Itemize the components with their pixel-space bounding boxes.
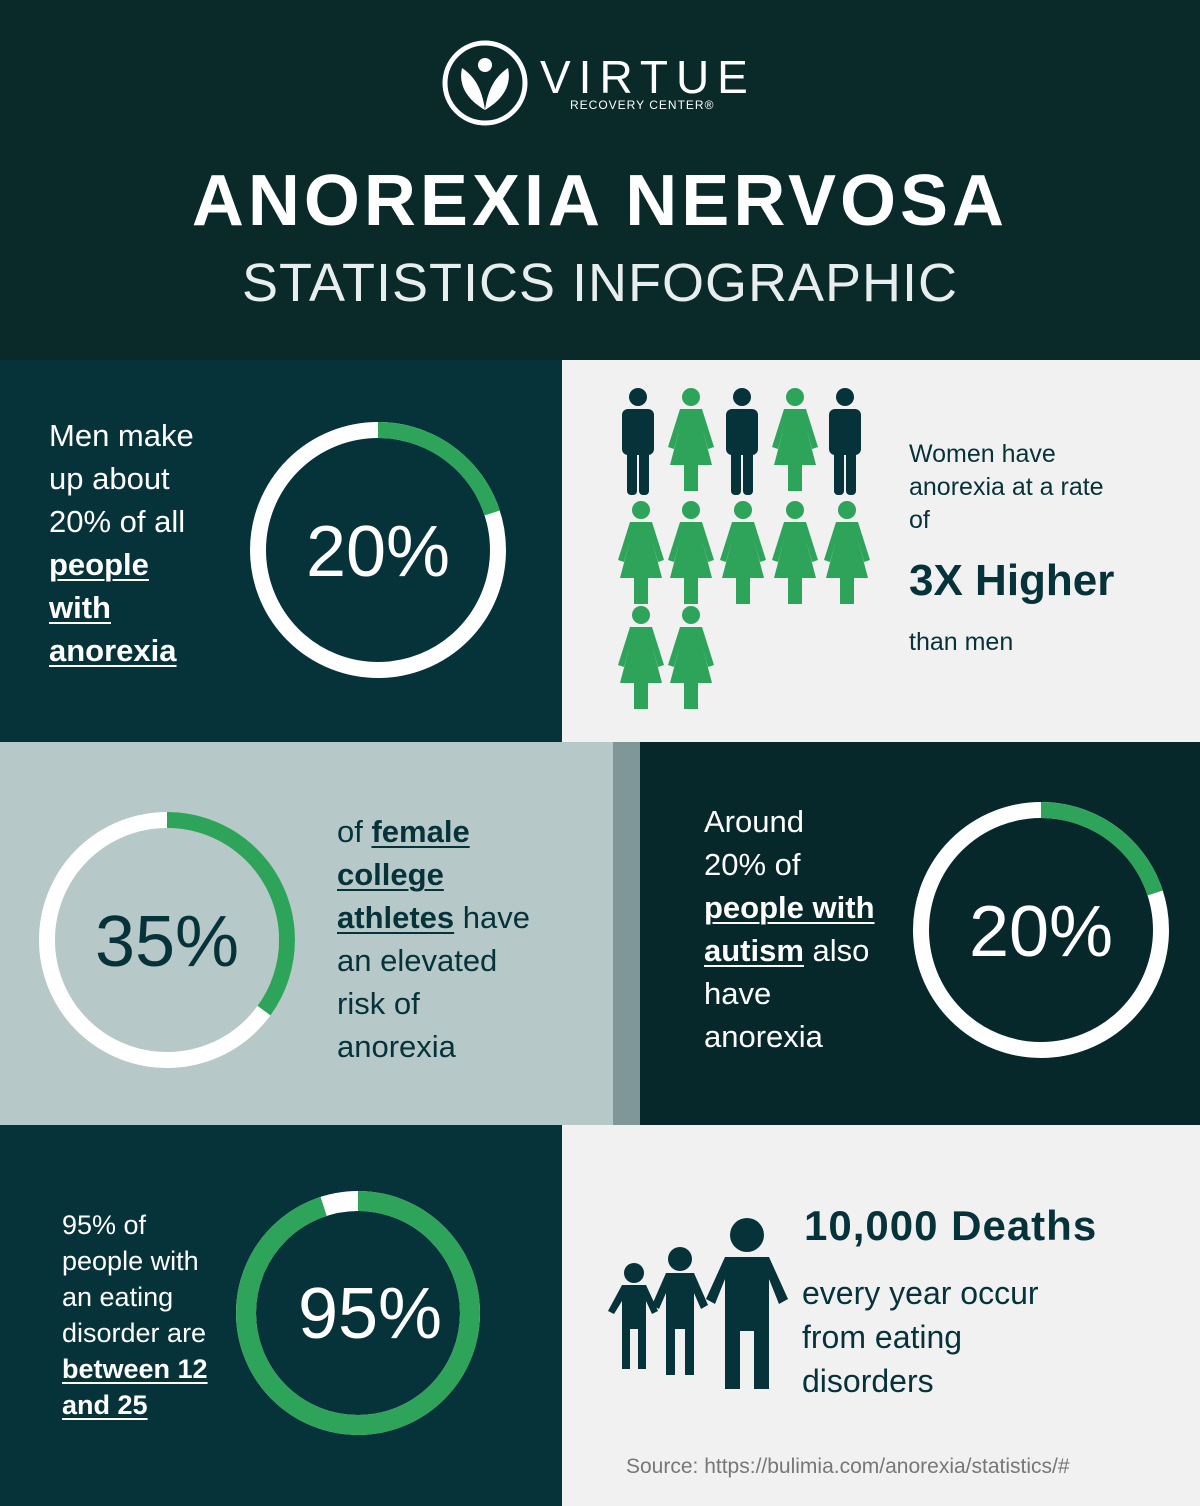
text: men make up: Men make <box>49 418 194 453</box>
icon: people grid <box>618 388 870 709</box>
text: autism: autism also <box>704 933 869 968</box>
panel: women 3x <box>562 360 1200 742</box>
text: athletes: an elevated <box>337 943 497 978</box>
text: deaths: from eating <box>802 1319 962 1355</box>
text: age <box>62 1210 208 1420</box>
panel: athletes 35% <box>0 742 613 1125</box>
text: age: and 25 <box>62 1390 148 1420</box>
text: athletes: athletes have <box>337 900 530 935</box>
text: age: 95% of <box>62 1210 146 1240</box>
text: age: an eating <box>62 1282 173 1312</box>
text: autism: people with <box>704 890 874 925</box>
text: deaths <box>802 1275 1039 1399</box>
donut: 20%: 20% <box>306 512 450 592</box>
icon: family <box>608 1218 788 1389</box>
panel: women 3x: than men <box>909 628 1013 656</box>
logo <box>442 40 756 126</box>
donut: 35% <box>39 812 295 1068</box>
text: athletes: risk of <box>337 986 420 1021</box>
text: women rate: anorexia at a rate <box>909 473 1104 501</box>
panel: age 95% <box>0 1125 562 1506</box>
text: autism: have <box>704 976 771 1011</box>
text: women rate <box>909 440 1104 534</box>
donut: 20% <box>250 422 506 678</box>
text: autism: Around <box>704 804 804 839</box>
stat: 10,000 Deaths: 10,000 Deaths <box>804 1202 1097 1249</box>
text: men make up: 20% of all <box>49 504 185 539</box>
source: Source: https://bulimia.com/anorexia/statistics/# <box>626 1455 1070 1478</box>
logo: RECOVERY CENTER® <box>570 98 714 112</box>
text: men make up: up about <box>49 461 170 496</box>
text: athletes: anorexia <box>337 1029 456 1064</box>
icon: logo emblem <box>442 40 528 126</box>
text: men make up: anorexia <box>49 633 177 668</box>
donut: 20% autism: 20% <box>969 892 1113 972</box>
text: autism: 20% of <box>704 847 801 882</box>
text: deaths: every year occur <box>802 1275 1039 1311</box>
panel: men 20% <box>0 360 562 742</box>
logo: VIRTUE <box>540 51 756 103</box>
text: autism: anorexia <box>704 1019 823 1054</box>
donut: 95% <box>236 1191 480 1435</box>
header <box>0 0 1200 360</box>
text: athletes: college <box>337 857 444 892</box>
stat: 3X Higher: 3X Higher <box>909 556 1114 605</box>
text: autism <box>704 804 874 1054</box>
panel: autism 20% <box>640 742 1200 1125</box>
title: ANOREXIA NERVOSA <box>192 161 1008 241</box>
text: deaths: disorders <box>802 1363 934 1399</box>
text: age: disorder are <box>62 1318 206 1348</box>
text: age: between 12 <box>62 1354 208 1384</box>
donut: 35%: 35% <box>95 902 239 982</box>
panel: deaths <box>562 1125 1200 1506</box>
text: women rate: of <box>909 506 930 534</box>
donut: 95%: 95% <box>298 1274 442 1354</box>
text: men make up: people <box>49 547 149 582</box>
text: athletes <box>337 814 530 1064</box>
text: men make up: with <box>49 590 111 625</box>
text: men make up <box>48 418 194 668</box>
donut: 20% autism <box>913 802 1169 1058</box>
subtitle: STATISTICS INFOGRAPHIC <box>242 253 958 313</box>
text: age: people with <box>62 1246 199 1276</box>
text: women rate: Women have <box>909 440 1056 468</box>
text: athletes: of female <box>337 814 470 849</box>
